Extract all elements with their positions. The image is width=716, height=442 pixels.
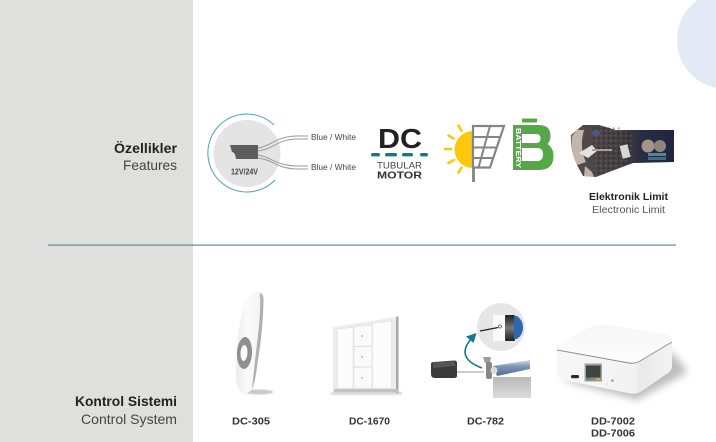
product: DC-1670 wall switch: DC-1670: [349, 416, 390, 428]
wiring diagram icon: Blue / White: [311, 163, 357, 172]
icon: electronic limit motor cutaway: [571, 125, 674, 216]
wiring diagram icon: [208, 114, 357, 192]
icon: DC tubular motor: MOTOR: [377, 170, 423, 182]
icon: DC tubular motor: [371, 123, 428, 182]
product: DD-7002 / DD-7006 gateway: DD-7006: [591, 428, 635, 440]
wiring diagram icon: 12V/24V: [231, 168, 259, 176]
heading: control system: Control System: [81, 412, 177, 427]
wiring diagram icon: Blue / White: [311, 133, 357, 142]
heading: control system: Kontrol Sistemi: [75, 394, 177, 409]
heading: features: Özellikler: [114, 141, 178, 156]
product: DC-305 remote: DC-305: [232, 416, 270, 428]
icon: DC tubular motor: TUBULAR: [377, 160, 423, 170]
product: DD-7002 / DD-7006 gateway: [557, 325, 688, 440]
icon: battery: BATTERY: [514, 128, 521, 168]
heading: features: [114, 141, 178, 173]
icon: solar panel: [445, 126, 504, 182]
decorative corner circle: [677, 0, 716, 89]
product: DD-7002 / DD-7006 gateway: DD-7002: [591, 416, 635, 428]
left sidebar panel: [0, 0, 193, 442]
icon: electronic limit motor cutaway: Electronic Limit: [592, 205, 665, 216]
icon: DC tubular motor: DC: [378, 123, 422, 154]
icon: battery: [513, 118, 554, 170]
heading: control system: [75, 394, 177, 427]
section divider: [48, 244, 676, 246]
heading: features: Features: [123, 158, 177, 173]
product: DC-305 remote: [232, 292, 273, 428]
product: DC-782 charger diagram: [431, 303, 531, 428]
icon: electronic limit motor cutaway: Elektronik Limit: [589, 192, 669, 203]
product: DC-782 charger diagram: DC-782: [467, 416, 504, 428]
product: DC-1670 wall switch: [331, 316, 402, 428]
